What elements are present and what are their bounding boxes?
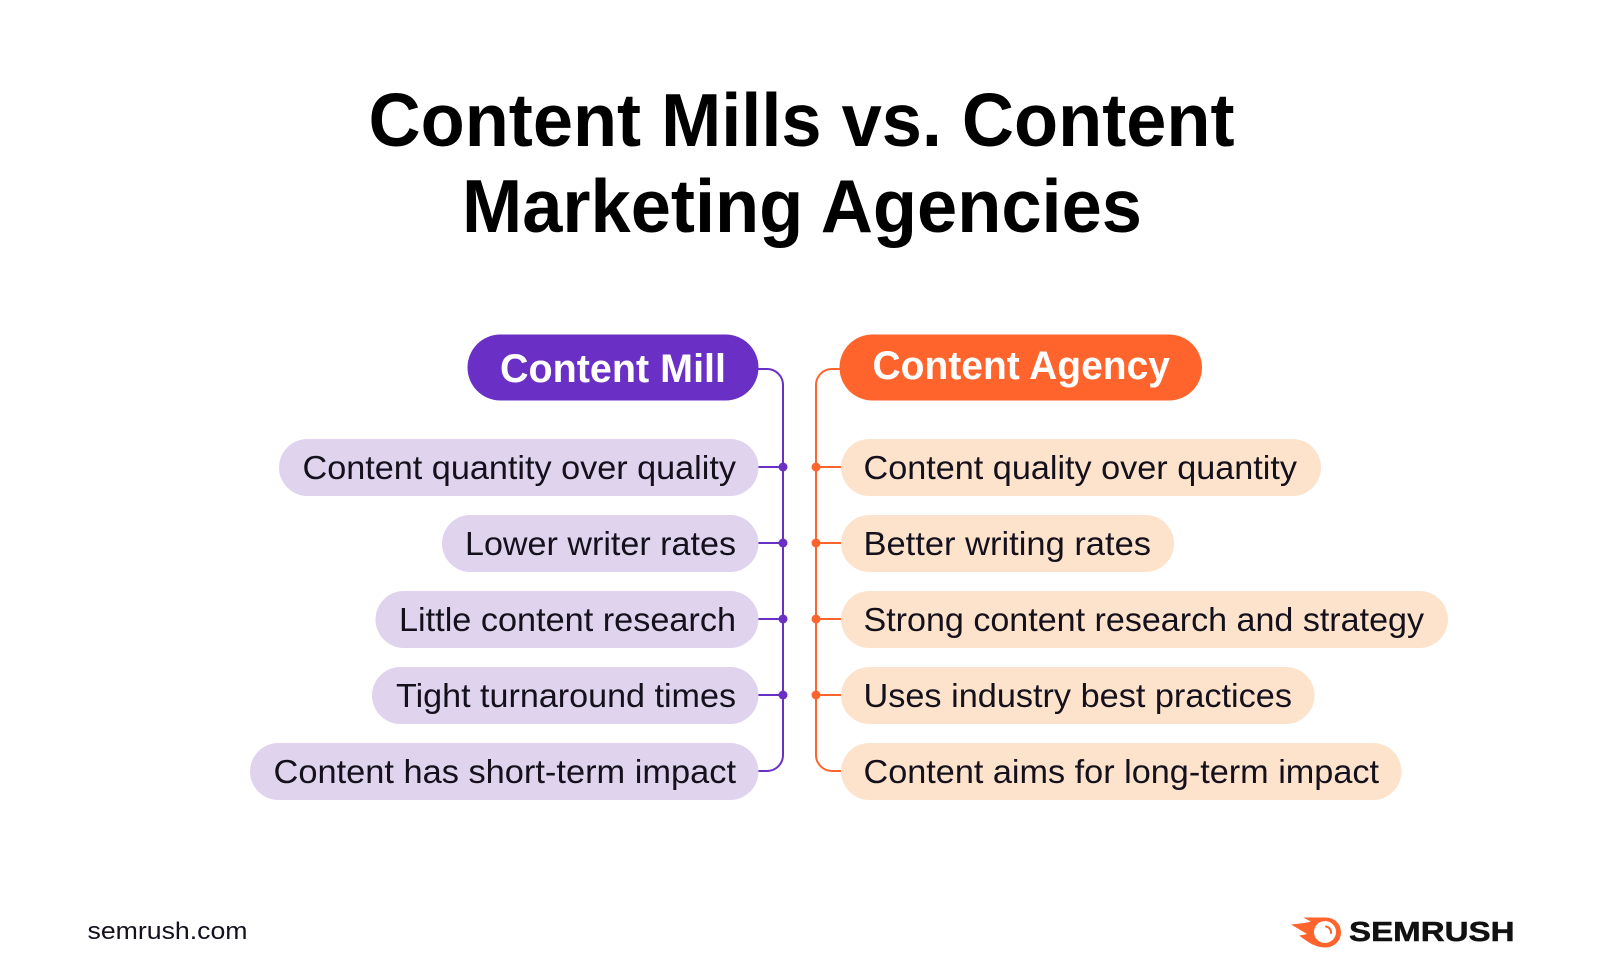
item: tight turnaround times <box>372 667 758 724</box>
icon: flame <box>1291 918 1341 948</box>
item: strong content research and strategy <box>841 591 1448 648</box>
title: Content Mills vs. Content <box>368 78 1235 162</box>
item: tight turnaround times: Tight turnaround times <box>396 677 736 714</box>
item: content quantity over quality <box>279 439 758 496</box>
panel: content mill <box>250 334 788 800</box>
title <box>368 78 1235 248</box>
item: little content research: Little content research <box>399 601 736 638</box>
item: strong content research and strategy: Strong content research and strategy <box>864 601 1425 638</box>
title: Marketing Agencies <box>462 164 1142 248</box>
item: lower writer rates: Lower writer rates <box>465 525 736 562</box>
item: lower writer rates <box>442 515 758 572</box>
item: content has short-term impact: Content has short-term impact <box>274 753 736 790</box>
item: content quality over quantity: Content quality over quantity <box>864 449 1298 486</box>
heading: content mill <box>468 334 758 400</box>
item: content aims for long-term impact <box>841 743 1402 800</box>
item: better writing rates: Better writing rates <box>864 525 1151 562</box>
logo: semrush <box>1291 916 1514 948</box>
connector: content agency <box>812 369 841 771</box>
heading: content mill: Content Mill <box>500 347 726 391</box>
item: content aims for long-term impact: Content aims for long-term impact <box>864 753 1379 790</box>
wordmark: SEMRUSH <box>1349 916 1514 947</box>
item: better writing rates <box>841 515 1174 572</box>
item: little content research <box>376 591 758 648</box>
panel: content agency <box>812 334 1448 800</box>
item: uses industry best practices <box>841 667 1314 724</box>
item: content quality over quantity <box>841 439 1321 496</box>
connector: content mill <box>758 369 788 771</box>
item: content has short-term impact <box>250 743 758 800</box>
item: uses industry best practices: Uses industry best practices <box>864 677 1292 714</box>
heading: content agency: Content Agency <box>872 344 1171 388</box>
footer: source url: semrush.com <box>88 918 247 945</box>
heading: content agency <box>840 334 1202 400</box>
item: content quantity over quality: Content quantity over quality <box>302 449 737 486</box>
